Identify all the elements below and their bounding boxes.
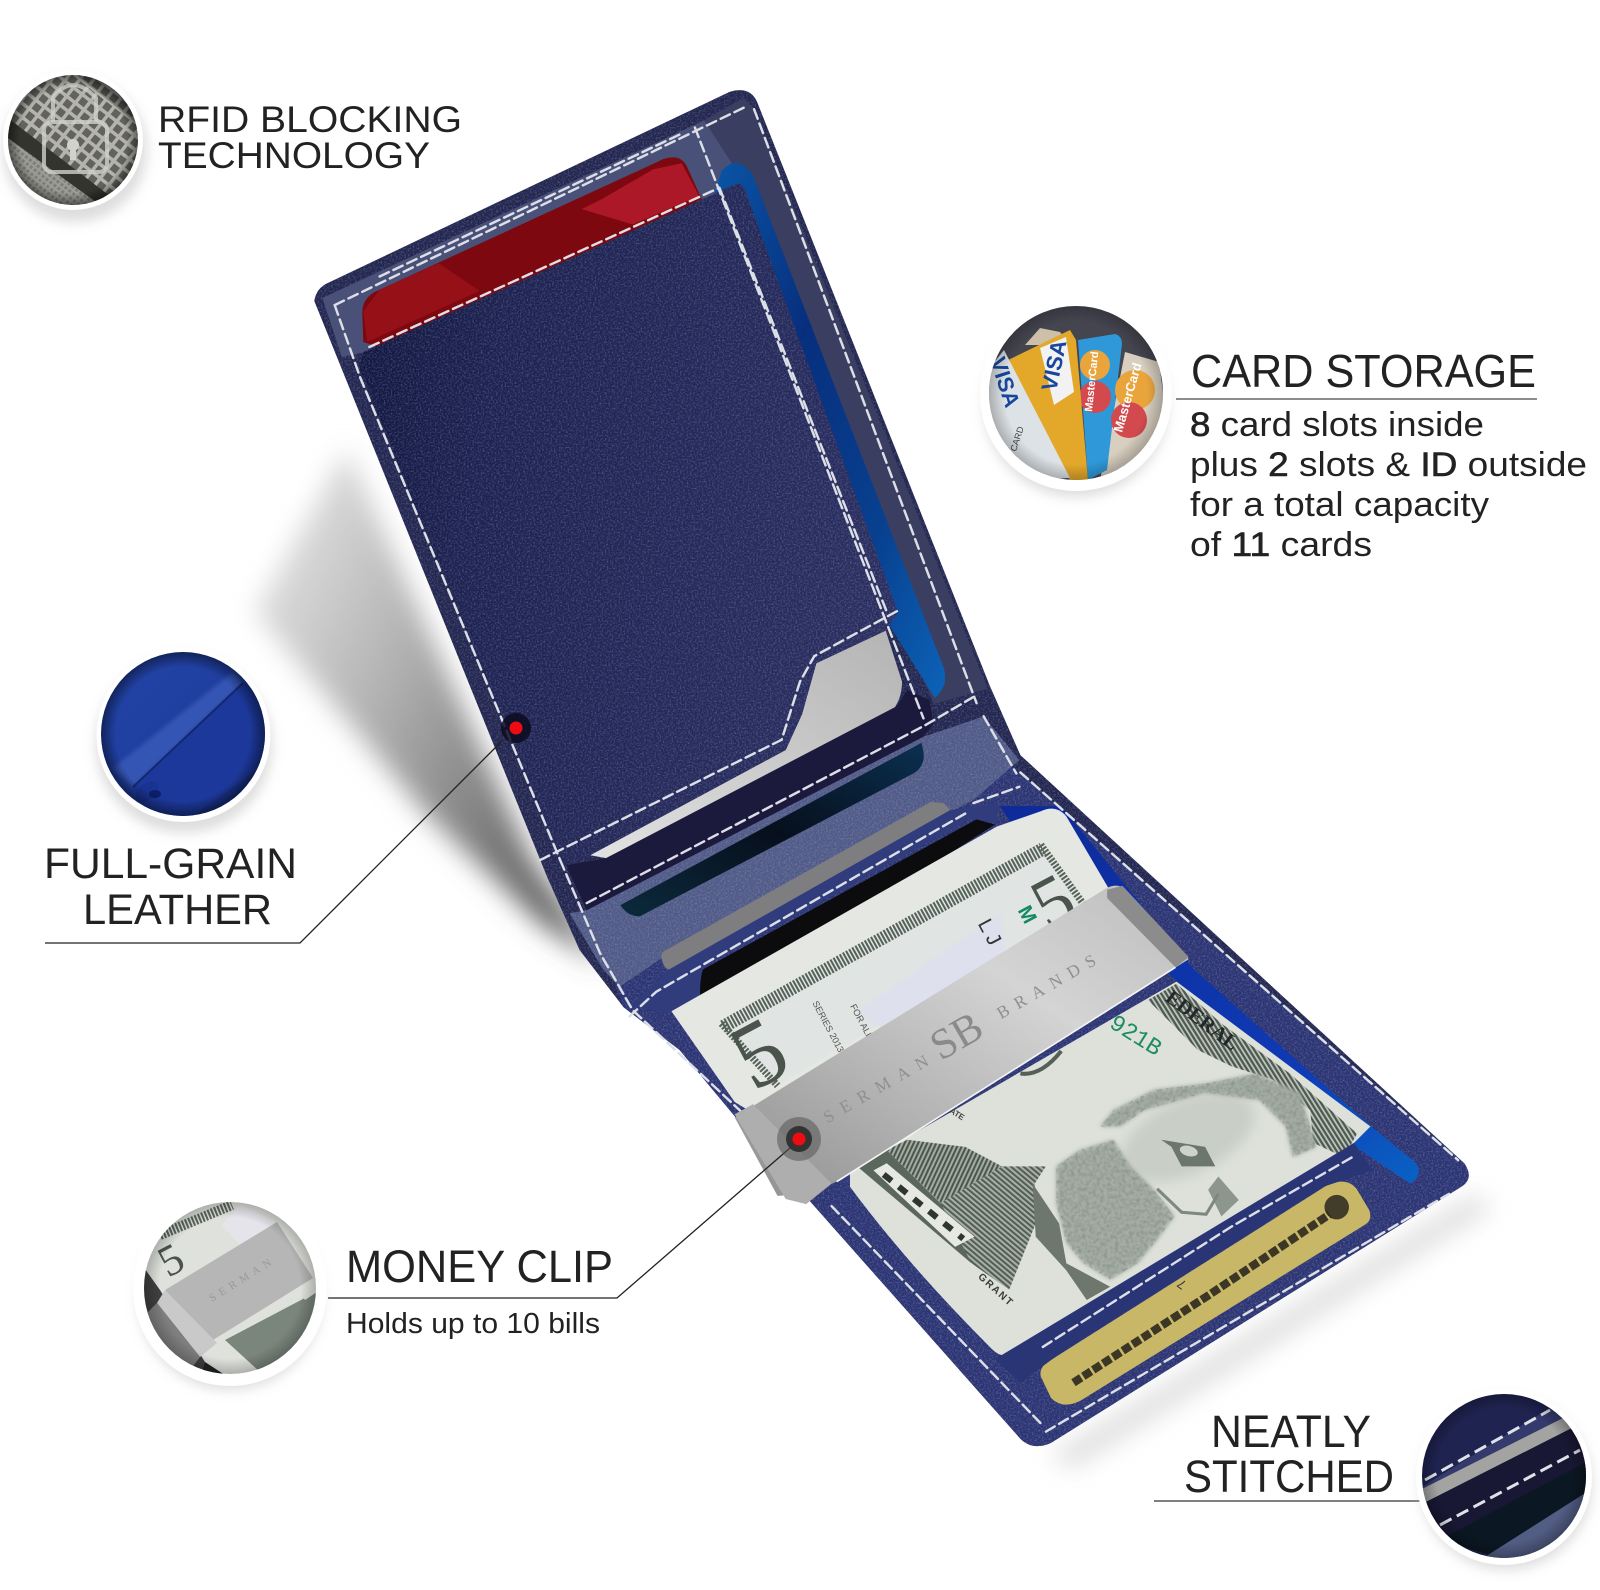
clip end lip: [1107, 886, 1189, 967]
nose shadow: [1208, 1177, 1239, 1216]
icon: blue leather fold: [96, 648, 272, 833]
red card: [362, 157, 704, 347]
jacket right panel: [941, 1166, 1046, 1290]
gold card: [1040, 1182, 1370, 1405]
card label text: VISA: [985, 354, 1025, 410]
black card: [700, 819, 995, 1005]
front pocket: [359, 184, 898, 865]
gold card corner emblem: [1324, 1195, 1349, 1219]
eye and brow: [1161, 1140, 1215, 1166]
feature: neatly stitched: [1154, 1389, 1592, 1570]
callout line: money clip: [328, 1148, 790, 1298]
heading: neatly stitched: NEATLY: [1211, 1406, 1371, 1457]
clip engraved brand: SERMAN: [820, 1047, 940, 1127]
dark teal card: [620, 743, 924, 916]
card storage description: of 11 cards: [1190, 526, 1372, 564]
clip engraving in close-up: SERMAN: [207, 1254, 278, 1305]
heading: full-grain leather: LEATHER: [83, 886, 272, 934]
engraved bill border: [723, 849, 1043, 1027]
feature: card storage: [980, 299, 1587, 564]
eye highlight: [1179, 1144, 1199, 1158]
bill numeral right: 5: [1018, 857, 1088, 946]
wallet silhouette: [314, 90, 1469, 1446]
blue card on flap: [714, 163, 945, 698]
bill series text: SERIES 2013: [810, 999, 846, 1054]
fold leather: [569, 716, 1019, 987]
forehead shading: [1107, 1073, 1268, 1200]
heading: RFID blocking technology: [158, 99, 462, 176]
engraved right border: [1041, 845, 1083, 903]
upper edge band: [1148, 984, 1357, 1157]
red card lighter facets: [582, 163, 699, 224]
clip lower highlight: [837, 967, 1176, 1182]
hair texture: [1100, 1073, 1316, 1157]
left stitching beside the bills: [560, 860, 742, 1112]
grain on front pocket: [359, 184, 898, 865]
card storage description: 8 card slots inside: [1190, 406, 1484, 444]
gold card number mark: 7: [1174, 1276, 1189, 1292]
heading: full-grain leather: [44, 840, 297, 934]
bill printed panel: [714, 845, 1088, 1110]
cast shadow of the upper flap: [255, 449, 602, 964]
clip close-up numeral: 5: [150, 1233, 192, 1287]
heading rule: [1176, 398, 1537, 400]
callout line: full-grain leather: [45, 740, 503, 943]
icon: stitching close-up: [1416, 1389, 1592, 1570]
card label text: MasterCard: [1110, 361, 1145, 434]
gray card strip: [661, 802, 950, 969]
heading: full-grain leather: FULL-GRAIN: [44, 840, 297, 888]
lapel band around the text strip: [857, 1150, 974, 1263]
engraved left border: [721, 1023, 778, 1086]
top rim of flap: [322, 120, 745, 357]
portrait oval fragment: [1020, 1051, 1061, 1074]
bill numeral left: 5: [714, 996, 804, 1110]
clip fold bar: [735, 1104, 832, 1204]
lavender security tint: [859, 913, 1005, 1036]
icon: fan of credit cards: [980, 299, 1172, 497]
blue card lower: [1000, 806, 1419, 1184]
cast shadow of the lower panel: [1051, 1194, 1492, 1469]
bill serial number: 921B: [1104, 1010, 1166, 1063]
bill stack upper part: [671, 809, 1114, 1117]
bill bracket mark: L J: [973, 915, 1005, 949]
marker: clip point: [777, 1117, 821, 1161]
nose line: [1157, 1189, 1218, 1214]
feature: full-grain leather: [44, 648, 297, 934]
jacket left panel: [887, 1140, 1002, 1203]
card label text: CARD: [1008, 425, 1026, 453]
beard texture: [1056, 1140, 1174, 1280]
beard: [1056, 1140, 1174, 1280]
heading: card storage: CARD STORAGE: [1191, 345, 1536, 397]
stitching: [335, 107, 1458, 1432]
lower navy rim: [630, 803, 997, 1013]
heading: RFID blocking technology: RFID BLOCKING: [158, 99, 462, 140]
dark strap under the pocket: [566, 690, 934, 910]
steel card: [590, 631, 902, 858]
lower panel leather: [587, 760, 1469, 1446]
bill stack lower part: [850, 982, 1370, 1355]
bill green mark: M: [1013, 902, 1040, 928]
money clip: [735, 886, 1189, 1204]
grain on wallet silhouette: [314, 90, 1469, 1446]
heading rule: [1154, 1500, 1422, 1502]
feature: money clip: [133, 1192, 613, 1390]
icon: RFID fabric and lock: [0, 70, 150, 222]
heading: RFID blocking technology: TECHNOLOGY: [158, 135, 430, 176]
lapel glyphs: [884, 1174, 963, 1239]
clip engraved monogram: SB: [922, 1003, 991, 1070]
card label text: MasterCard: [1083, 351, 1101, 412]
card storage description: [1190, 406, 1587, 564]
lapel text strip: [873, 1163, 974, 1247]
card label text: VISA: [1036, 338, 1072, 393]
navy pocket strap over gold card: [995, 1143, 1372, 1383]
heading: neatly stitched: [1184, 1406, 1394, 1502]
clip engraved brand word: BRANDS: [994, 947, 1106, 1023]
feature: RFID blocking: [0, 70, 462, 222]
bill small print: ATE: [948, 1106, 966, 1123]
gold card ornament band: [1073, 1214, 1330, 1383]
money clip description: Holds up to 10 bills: [346, 1308, 600, 1340]
grant caption: GRANT: [976, 1272, 1016, 1309]
wallet photo illustration: [255, 90, 1492, 1469]
hair: [1100, 1073, 1316, 1157]
bill legal text: FOR ALL: [848, 1002, 875, 1040]
icon: clip close-up: [133, 1192, 327, 1390]
grain on fold leather: [569, 716, 1019, 987]
federal band text: EDERAL: [1161, 986, 1242, 1055]
collar and neck shade: [1033, 1184, 1110, 1300]
card storage description: for a total capacity: [1190, 486, 1489, 524]
right leather strip of flap: [704, 98, 988, 704]
heading: neatly stitched: STITCHED: [1184, 1451, 1394, 1502]
portrait on the bill: [857, 984, 1357, 1309]
card storage description: plus 2 slots & ID outside: [1190, 446, 1587, 484]
marker: leather point: [501, 713, 531, 743]
heading: money clip: MONEY CLIP: [346, 1241, 613, 1292]
